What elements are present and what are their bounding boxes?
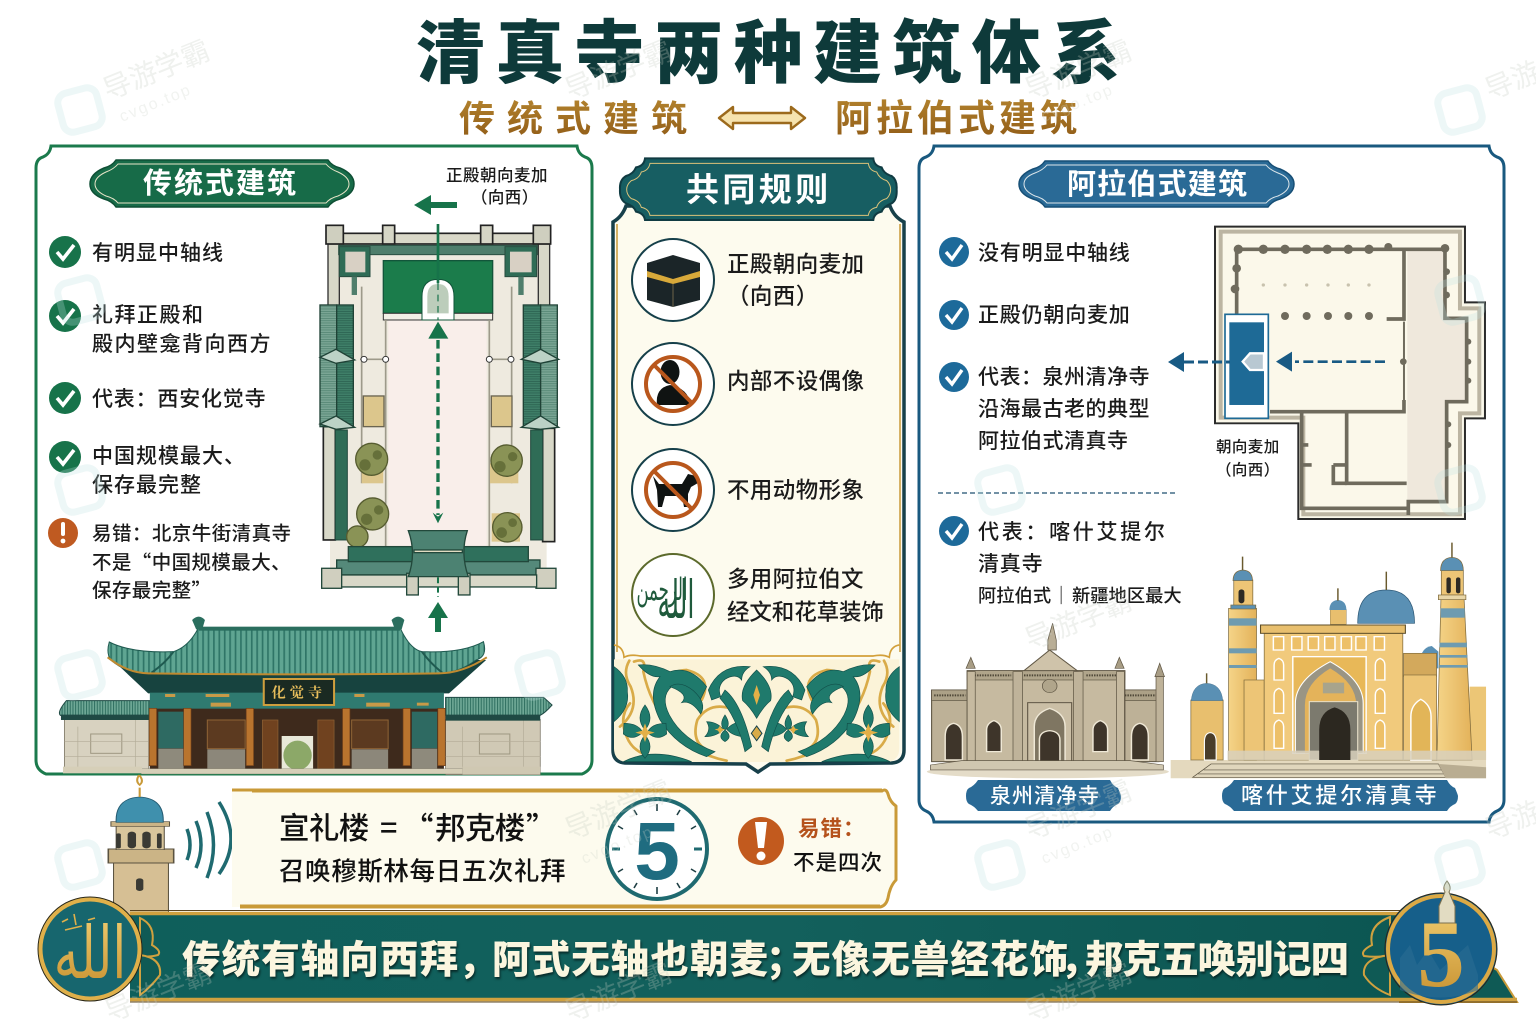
card: minaret call to prayer: ” xyxy=(526,804,556,848)
subtitle: two systems xyxy=(459,88,1081,142)
site plan: traditional xyxy=(320,224,559,597)
ornament: right petals xyxy=(1363,917,1390,995)
heading: Arabic: 阿拉伯式建筑 xyxy=(1067,161,1248,203)
axis xyxy=(434,224,442,283)
heading: common rules xyxy=(620,158,897,220)
bullet: Kashgar: 阿拉伯式 xyxy=(978,582,1051,608)
label: faces Mecca: 正殿朝向麦加 xyxy=(446,162,548,186)
bullet: axis: 有明显中轴线 xyxy=(92,237,224,267)
rule: Arabic script and floral decoration: 经文和花草装饰 xyxy=(727,595,884,627)
subtitle: two systems: 传统式建筑 xyxy=(459,90,699,142)
label: Idkah: 喀什艾提尔清真寺 xyxy=(1241,778,1439,810)
note: common error: 不是四次 xyxy=(793,846,883,877)
heading: traditional: 传统式建筑 xyxy=(143,160,298,202)
text: mnemonic: 无像无兽经花饰 xyxy=(792,929,1069,985)
watermarks: 导游学霸 xyxy=(1018,29,1137,108)
icon: warning xyxy=(738,817,784,865)
rule: no idols: 内部不设偶像 xyxy=(727,364,864,396)
label: Qingjing: 泉州清净寺 xyxy=(990,780,1100,810)
bullet: main hall xyxy=(49,299,272,358)
minarets xyxy=(1229,557,1472,760)
subtitle: two systems: 阿拉伯式建筑 xyxy=(835,88,1081,142)
rule: Arabic script and floral decoration: الله xyxy=(658,570,694,631)
text: mnemonic: 邦克五唤别记四 xyxy=(1085,929,1348,985)
columns xyxy=(149,708,445,766)
medallion: Allah calligraphy: الله xyxy=(54,910,126,995)
panel: common rules xyxy=(613,158,904,772)
trees xyxy=(347,443,522,547)
label: toward Mecca: 朝向麦加 xyxy=(1216,435,1280,457)
bullet: common error: 保存最完整” xyxy=(92,574,211,603)
bullet: example: 代表：西安化觉寺 xyxy=(92,383,266,413)
medallion: five: 5 xyxy=(1417,901,1465,1007)
icon: clock with five xyxy=(607,799,707,899)
card: minaret call to prayer xyxy=(232,790,896,907)
corner pavilions xyxy=(339,247,370,277)
label: faces Mecca: （向西） xyxy=(471,184,539,208)
rule: no idols xyxy=(632,343,864,425)
bullet: Kashgar: 代表：喀什艾提尔 xyxy=(978,516,1168,546)
walls xyxy=(333,233,543,244)
panel: common rules: 共同规则 xyxy=(686,163,832,211)
rule: Arabic script and floral decoration: 多用阿拉伯文 xyxy=(727,562,864,594)
panel: traditional architecture xyxy=(36,146,592,775)
label: faces Mecca xyxy=(446,162,548,208)
bullet: common error: 不是“中国规模最大、 xyxy=(92,546,291,575)
medallion: Allah calligraphy xyxy=(38,897,142,1001)
arrow: west xyxy=(414,195,457,215)
text: mnemonic: ， xyxy=(1060,929,1100,985)
text: mnemonic: ； xyxy=(766,929,806,985)
arrow: double headed xyxy=(719,107,805,129)
banner: mnemonic xyxy=(38,881,1517,1007)
list: traditional features xyxy=(48,236,292,603)
watermarks: cvgo.top xyxy=(1039,81,1116,126)
side courtyard lines xyxy=(360,287,513,547)
icon: minaret xyxy=(108,775,174,918)
bullet: Kashgar: ｜ xyxy=(1052,582,1070,608)
watermarks: cvgo.top xyxy=(117,81,194,126)
gate xyxy=(322,531,556,595)
rule: faces Mecca xyxy=(632,239,864,321)
illustration: Kashgar Idkah Mosque xyxy=(1171,543,1486,778)
bullet: Quanzhou: 代表：泉州清净寺 xyxy=(978,361,1150,391)
walls xyxy=(64,719,149,773)
bullet: Kashgar xyxy=(939,516,1182,608)
rule: Arabic script and floral decoration: الرحمن xyxy=(637,571,687,607)
illustration: Huajue Mosque xyxy=(59,617,552,775)
ornament: floral arabesque xyxy=(614,645,899,762)
watermarks: 导游学霸 xyxy=(96,29,215,108)
rule: no animal images: 不用动物形象 xyxy=(727,473,864,505)
watermarks: 导游学霸 xyxy=(1018,579,1137,658)
card: minaret call to prayer: 邦克楼 xyxy=(435,804,525,848)
bullet: common error: 易错：北京牛街清真寺 xyxy=(92,517,292,546)
side roofs xyxy=(59,701,150,715)
card: minaret call to prayer: 宣礼楼 xyxy=(279,804,369,848)
bullet: no axis: 没有明显中轴线 xyxy=(978,237,1131,267)
panel: Arabic architecture xyxy=(919,146,1504,822)
medallion: five xyxy=(1385,881,1497,1007)
note: common error xyxy=(793,812,883,877)
bullet: largest xyxy=(49,440,246,499)
watermarks: cvgo.top xyxy=(579,823,656,868)
bullet: largest: 中国规模最大、 xyxy=(92,440,246,470)
bullet: main hall: 礼拜正殿和 xyxy=(92,299,204,329)
floor plan: Qingjing Mosque xyxy=(1215,227,1485,519)
bullet: Quanzhou xyxy=(939,361,1150,455)
label: toward Mecca: （向西） xyxy=(1216,458,1280,480)
main hall xyxy=(383,261,493,313)
card: minaret call to prayer: = xyxy=(380,804,397,848)
bullet: common error xyxy=(48,517,292,603)
plaque: 化觉寺 xyxy=(272,682,326,702)
note: common error: 易错： xyxy=(798,812,866,843)
rule: faces Mecca: （向西） xyxy=(727,279,819,311)
label: Qingjing xyxy=(966,780,1121,811)
card: minaret call to prayer: 召唤穆斯林每日五次礼拜 xyxy=(279,851,566,888)
main body xyxy=(1244,680,1264,760)
text: mnemonic: ， xyxy=(458,929,498,985)
heading: Arabic xyxy=(1019,161,1294,207)
watermarks: 导游学霸 xyxy=(558,29,677,108)
illustration: Qingjing Mosque xyxy=(927,623,1169,778)
heading: traditional xyxy=(90,160,354,207)
main roof xyxy=(108,628,485,674)
bullet: faces Mecca: 正殿仍朝向麦加 xyxy=(978,299,1131,329)
arrow: toward Mecca xyxy=(1168,352,1230,372)
bullet: largest: 保存最完整 xyxy=(92,469,202,499)
icon: clock with five: 5 xyxy=(634,806,680,897)
list: Arabic features xyxy=(938,237,1182,608)
watermarks: 导游学霸 xyxy=(1018,769,1137,848)
arrow: axis entrance xyxy=(428,602,448,632)
side halls xyxy=(320,305,559,429)
text: mnemonic: 传统有轴向西拜 xyxy=(182,929,459,985)
card: minaret call to prayer: “ xyxy=(403,804,434,848)
rule: no animal images xyxy=(632,449,864,531)
label: toward Mecca xyxy=(1216,435,1280,480)
rule: Arabic script and floral decoration xyxy=(632,554,884,636)
ornament: left petals xyxy=(140,918,160,995)
rule: faces Mecca: 正殿朝向麦加 xyxy=(727,247,864,279)
eaves and brackets xyxy=(113,660,486,693)
watermarks: cvgo.top xyxy=(1039,823,1116,868)
bullet: Quanzhou: 阿拉伯式清真寺 xyxy=(978,425,1128,455)
plaque xyxy=(264,679,334,705)
bullet: Kashgar: 新疆地区最大 xyxy=(1072,582,1182,608)
bullet: main hall: 殿内壁龛背向西方 xyxy=(92,328,272,358)
text: mnemonic: 阿式无轴也朝麦 xyxy=(492,929,769,985)
bullet: Kashgar: 清真寺 xyxy=(978,548,1043,578)
bullet: Quanzhou: 沿海最古老的典型 xyxy=(978,393,1150,423)
hall interior xyxy=(150,708,444,770)
watermarks: 导游学霸 xyxy=(558,769,677,848)
icon: sound waves xyxy=(187,802,231,878)
left annex tower xyxy=(1191,700,1223,760)
